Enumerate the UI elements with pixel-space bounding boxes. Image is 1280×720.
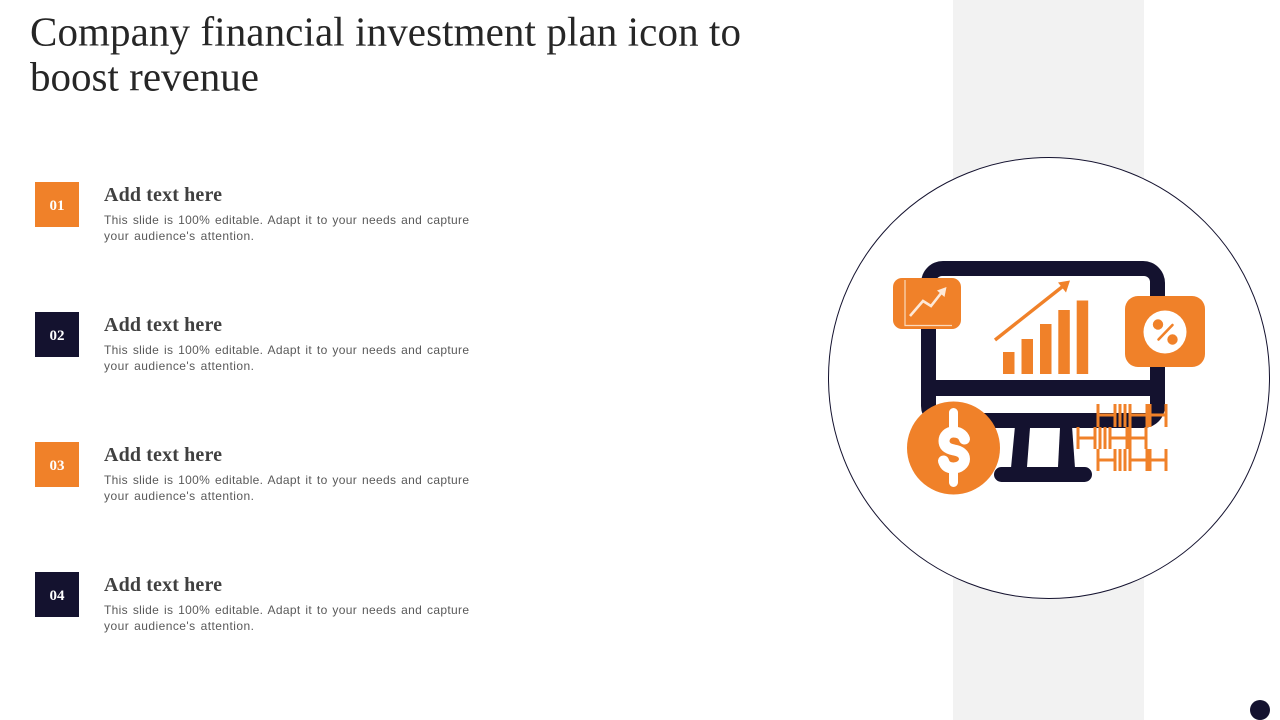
item 03 description: This slide is 100% editable. Adapt it to your needs and capture [104, 473, 469, 487]
list item 03 [35, 442, 469, 503]
title: Company financial investment plan icon to [30, 8, 741, 54]
number badge 03 [35, 442, 79, 487]
number badge 04 [35, 572, 79, 617]
list item 01 [35, 182, 469, 243]
garbled orange H glyph rows [1078, 404, 1166, 471]
icon: computer monitor with stand [921, 261, 1165, 482]
number badge 04: 04 [50, 588, 65, 604]
item 01 heading: Add text here [104, 184, 222, 206]
item 01 description: your audience's attention. [104, 229, 254, 243]
number badge 01: 01 [50, 198, 64, 214]
item 02 description: This slide is 100% editable. Adapt it to your needs and capture [104, 343, 469, 357]
item 02 heading: Add text here [104, 314, 222, 336]
number badge 02 [35, 312, 79, 357]
item 04 description: This slide is 100% editable. Adapt it to your needs and capture [104, 603, 469, 617]
item 04 description [104, 603, 469, 633]
number badge 02: 02 [50, 328, 64, 344]
list item 04 [35, 572, 469, 633]
item 02 description [104, 343, 469, 373]
background grey band [953, 0, 1144, 720]
corner navy dot [1250, 700, 1270, 720]
item 04 heading: Add text here [104, 574, 222, 596]
icon: dollar coin [907, 402, 1000, 494]
list item 02 [35, 312, 469, 373]
item 03 heading: Add text here [104, 444, 222, 466]
item 01 description: This slide is 100% editable. Adapt it to your needs and capture [104, 213, 469, 227]
icon: bar chart with rising arrow [995, 280, 1088, 374]
title [30, 8, 741, 100]
item 03 description: your audience's attention. [104, 489, 254, 503]
item 01 description [104, 213, 469, 243]
icon: line chart card [893, 278, 961, 329]
item 04 description: your audience's attention. [104, 619, 254, 633]
number badge 03: 03 [50, 458, 64, 474]
icon: percent card [1125, 296, 1205, 367]
number badge 01 [35, 182, 79, 227]
title: boost revenue [30, 54, 259, 100]
item 03 description [104, 473, 469, 503]
large outlined circle [828, 158, 1270, 598]
item 02 description: your audience's attention. [104, 359, 254, 373]
